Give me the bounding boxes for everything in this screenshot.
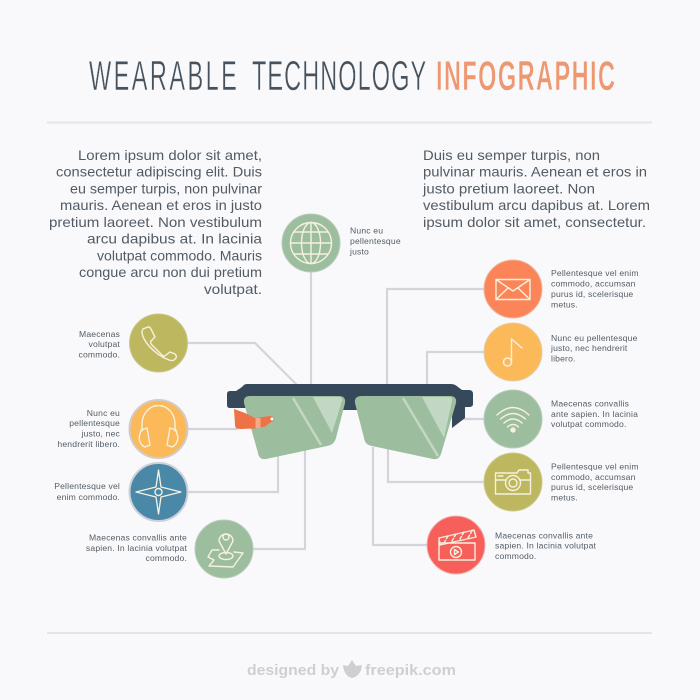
footer credit: designed by [247,662,340,679]
node: map pin: commodo. [146,553,187,563]
node: phone: volutpat [89,339,120,349]
connector lines [187,272,485,549]
icon: envelope [496,280,530,300]
node: map pin: Maecenas convallis ante [89,532,187,542]
node: headphones: pellentesque [69,418,120,428]
text block: right intro paragraph: vestibulum arcu dapibus at. Lorem [423,198,650,213]
node: phone: Maecenas [79,329,120,339]
icon: globe [290,222,332,264]
node: mail: Pellentesque vel enim [551,268,639,278]
text block: left intro paragraph: pretium laoreet. Non vestibulum [49,215,262,230]
node: wifi [484,390,638,448]
icon: music note [504,339,522,366]
icon: wifi [497,408,529,432]
node: headphones: justo, nec [81,428,121,438]
node: phone [79,314,188,372]
text block: right intro paragraph: ipsum dolor sit amet, consectetur. [423,215,646,230]
node: globe [282,214,401,272]
left lens [244,396,345,459]
icon: map pin [208,534,243,567]
node: wifi: Maecenas convallis [551,398,629,408]
node: music: libero. [551,354,576,364]
text block: right intro paragraph: Duis eu semper turpis, non [423,148,600,163]
node: globe: justo [349,246,369,256]
node: wifi: volutpat commodo. [551,419,626,429]
node: phone: commodo. [79,350,120,360]
right lens [355,396,456,459]
text block: left intro paragraph: volutpat commodo. Mauris [97,248,262,264]
icon: headphones [139,406,178,447]
title: WEARABLE [89,53,237,100]
title: TECHNOLOGY [252,53,426,100]
icon: camera [496,470,530,494]
node: music: justo, nec hendrerit [550,343,628,353]
footer credit: freepik.com [365,662,456,679]
title: INFOGRAPHIC [436,53,615,100]
text block: left intro paragraph: arcu dapibus at. In lacinia [87,232,262,247]
icon: clapperboard [439,530,476,560]
node: headphones: hendrerit libero. [57,439,120,449]
node: mail: metus. [551,300,578,310]
node: clapperboard: commodo. [495,551,536,561]
lens highlights [313,397,342,433]
node: camera [484,453,639,511]
node: mail: purus id, scelerisque [551,289,633,299]
text block: right intro paragraph: justo pretium laoreet. Non [422,182,595,196]
icon: compass star [136,470,181,514]
node: music [484,323,638,381]
text block: right intro paragraph [422,148,650,230]
node: camera: Pellentesque vel enim [551,462,639,472]
text block: right intro paragraph: pulvinar mauris. Aenean et eros in [423,165,647,180]
title [89,53,615,100]
text block: left intro paragraph: congue arcu non dui pretium [79,265,262,280]
node: camera: purus id, scelerisque [551,482,633,492]
text block: left intro paragraph [49,148,262,297]
text block: left intro paragraph: Lorem ipsum dolor sit amet, [78,148,262,163]
node: wifi: ante sapien. In lacinia [551,409,638,419]
node: music: Nunc eu pellentesque [551,333,638,343]
node: map pin: sapien. In lacinia volutpat [86,543,187,553]
text block: left intro paragraph: eu semper turpis, non pulvinar [70,182,262,196]
icon: phone [142,327,176,360]
text block: left intro paragraph: mauris. Aenean et eros in justo [60,198,262,213]
node: headphones [57,400,188,458]
node: clapperboard: Maecenas convallis ante [495,530,593,540]
node: headphones: Nunc eu [87,408,120,418]
node: globe: pellentesque [350,236,401,246]
footer credit [247,660,456,679]
node: camera: commodo, accumsan [551,472,636,482]
text block: left intro paragraph: volutpat. [204,282,262,297]
glasses frame [227,384,473,428]
node: camera: metus. [551,492,578,502]
node: clapperboard [427,516,597,574]
smart glasses [227,384,473,459]
node: compass: enim commodo. [57,492,120,502]
node: clapperboard: sapien. In lacinia volutpat [495,540,597,550]
text block: left intro paragraph: consectetur adipiscing elit. Duis [56,165,262,180]
node: compass: Pellentesque vel [54,481,120,491]
icon: freepik logo [343,660,362,678]
node: mail [484,260,639,318]
camera module [234,409,274,429]
node: mail: commodo, accumsan [551,278,636,288]
node: map pin [86,520,253,578]
node: compass [54,463,188,521]
node: globe: Nunc eu [350,226,383,236]
